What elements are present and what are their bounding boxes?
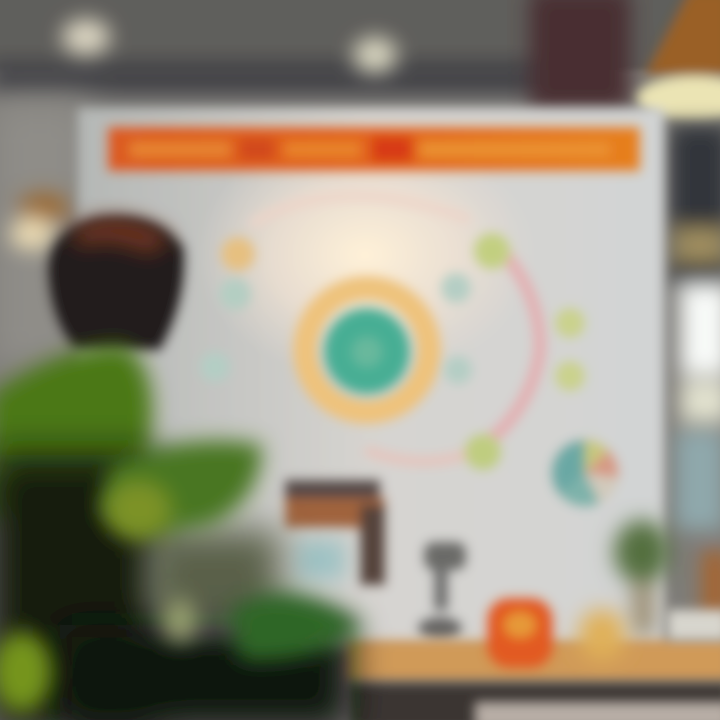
items in front of poster — [285, 480, 720, 720]
node icons — [200, 233, 585, 470]
wall lamp left — [10, 192, 70, 250]
teal gap below chair — [295, 540, 345, 580]
ceiling lights — [62, 19, 397, 73]
yellow object on table — [578, 609, 626, 661]
foreground plant — [0, 440, 362, 720]
poster — [78, 108, 664, 648]
desk figurine — [418, 542, 466, 639]
right window area — [670, 125, 720, 620]
small potted plant — [614, 520, 670, 635]
banner — [108, 127, 640, 171]
orange object on table — [487, 598, 553, 668]
pie chart — [551, 439, 619, 507]
wooden chair — [285, 480, 385, 585]
person silhouette — [0, 216, 184, 520]
pendant lamp — [637, 0, 720, 120]
table top — [345, 610, 720, 720]
pink ring arc — [250, 196, 540, 461]
central circle — [305, 288, 429, 412]
